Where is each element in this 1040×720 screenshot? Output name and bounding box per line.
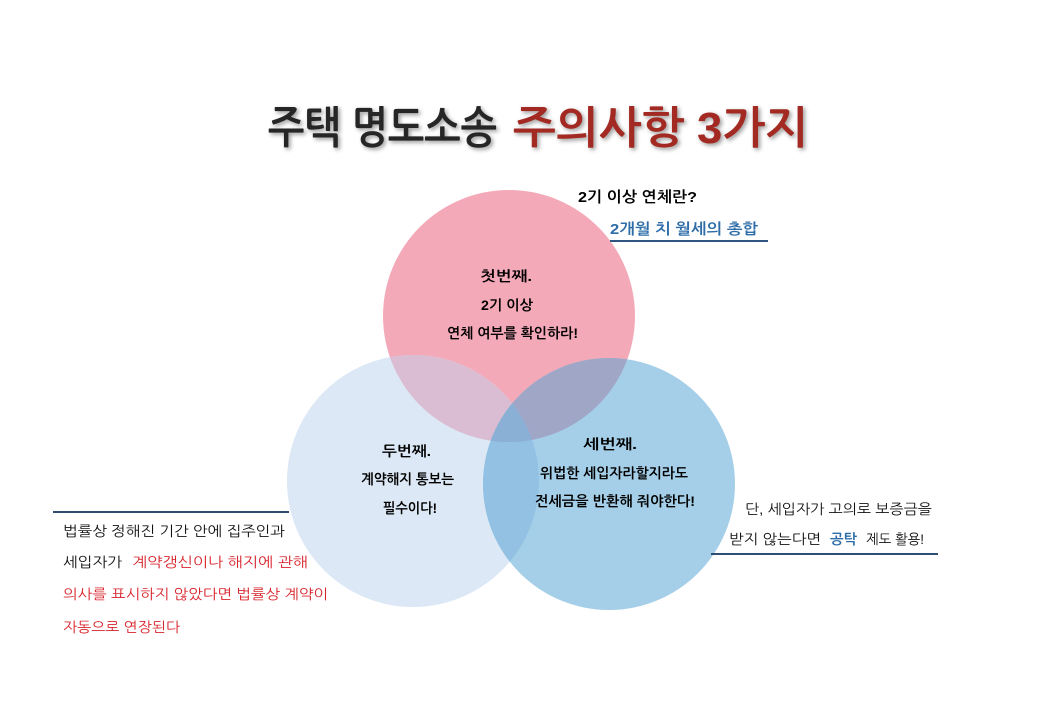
- text: second circle: 두번째.: [382, 443, 431, 459]
- circle: second, light blue: [287, 355, 539, 607]
- overlap: second and third: [483, 404, 539, 562]
- callout: arrears definition: 2개월 치 월세의 총합: [610, 221, 758, 238]
- text: second circle: 필수이다!: [383, 500, 437, 516]
- callout: automatic renewal: 계약갱신이나 해지에 관해: [132, 554, 308, 570]
- callout: automatic renewal: [53, 511, 328, 635]
- venn diagram: [287, 190, 735, 610]
- text: first circle: [447, 268, 578, 341]
- text: third circle: 전세금을 반환해 줘야한다!: [535, 493, 695, 509]
- title: 주택 명도소송: [268, 104, 497, 153]
- callout: deposit escrow: 공탁: [830, 531, 858, 547]
- text: first circle: 2기 이상: [481, 297, 534, 313]
- text: third circle: [535, 436, 695, 509]
- callout: arrears definition: [578, 189, 768, 242]
- text: third circle: 위법한 세입자라할지라도: [540, 465, 688, 481]
- callout: deposit escrow: 제도 활용!: [866, 531, 924, 547]
- callout: deposit escrow: 받지 않는다면: [729, 531, 821, 547]
- overlap: first and third: [491, 358, 628, 440]
- callout: automatic renewal: 자동으로 연장된다: [63, 619, 180, 635]
- overlap: first and second: [390, 355, 512, 441]
- callout: automatic renewal: 의사를 표시하지 않았다면 법률상 계약이: [63, 586, 328, 602]
- callout: automatic renewal: 세입자가: [63, 554, 123, 570]
- overlap: all three: [490, 404, 532, 442]
- callout: deposit escrow: [711, 501, 938, 555]
- text: first circle: 첫번째.: [480, 268, 532, 284]
- callout: automatic renewal: 법률상 정해진 기간 안에 집주인과: [63, 523, 286, 539]
- text: third circle: 세번째.: [583, 436, 637, 452]
- title: 주의사항 3가지: [513, 104, 808, 153]
- text: second circle: [361, 443, 454, 516]
- text: first circle: 연체 여부를 확인하라!: [447, 325, 578, 341]
- callout: arrears definition: 2기 이상 연체란?: [578, 189, 697, 206]
- circle: third, blue: [483, 358, 735, 610]
- title: [268, 104, 808, 153]
- text: second circle: 계약해지 통보는: [361, 471, 454, 487]
- circle: first, pink: [383, 190, 635, 442]
- callout: deposit escrow: 단, 세입자가 고의로 보증금을: [745, 501, 932, 517]
